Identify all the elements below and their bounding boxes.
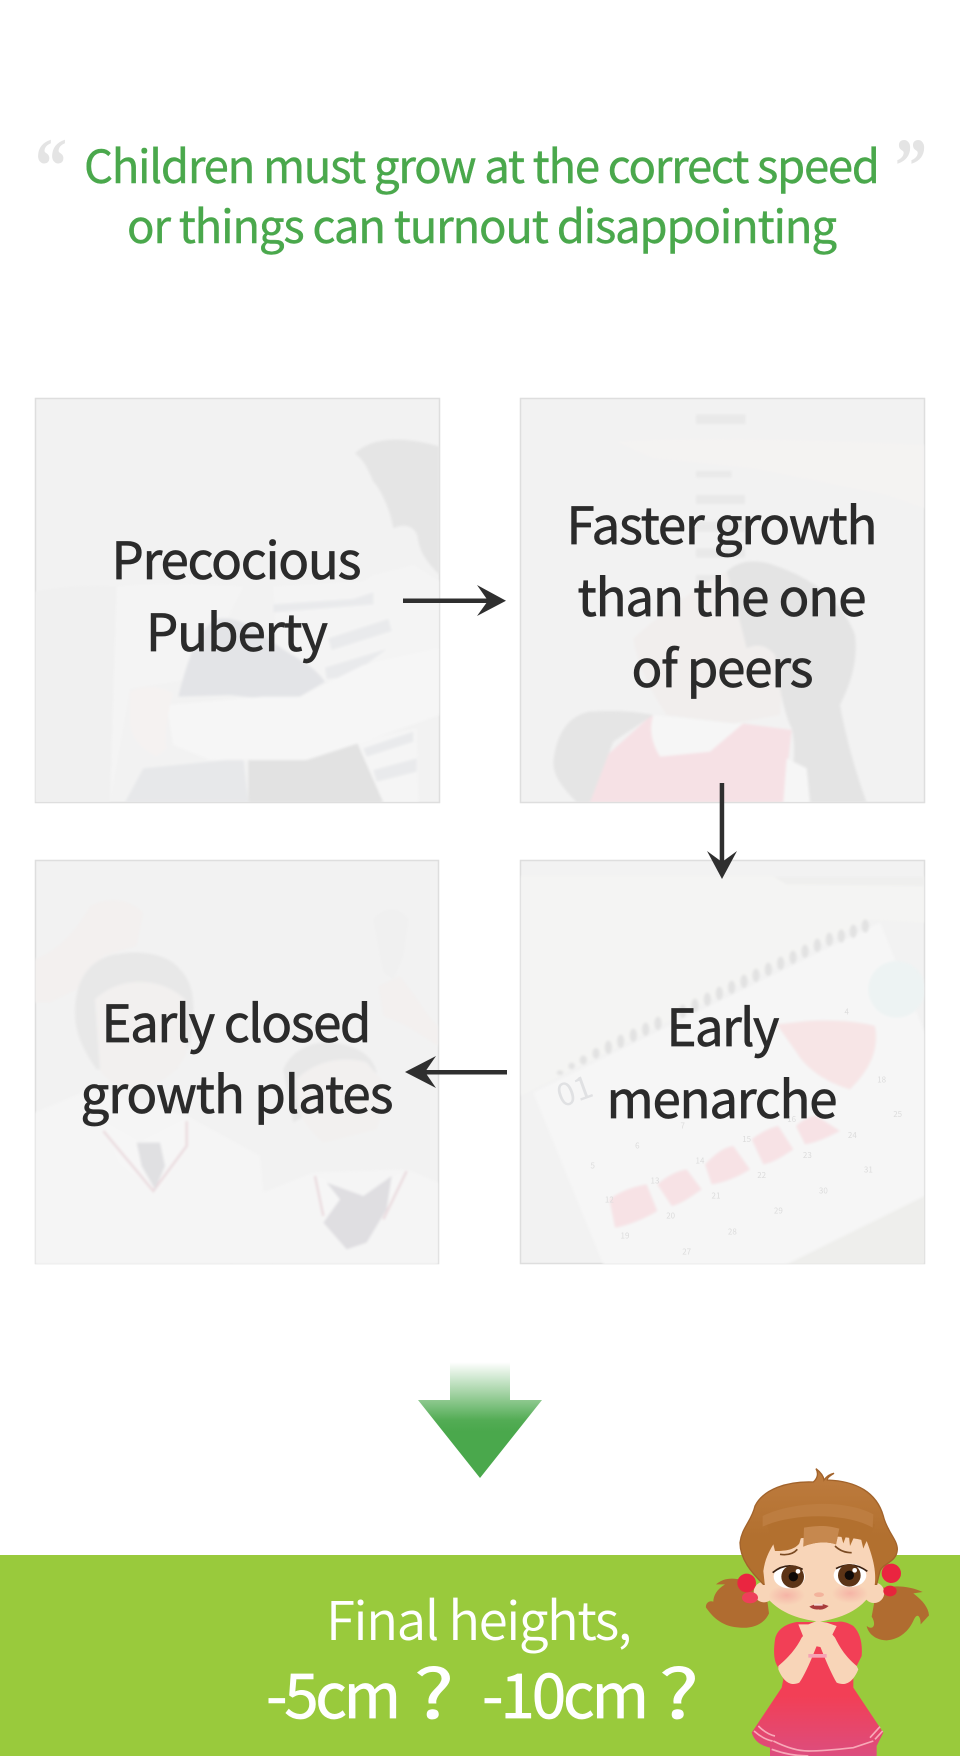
icon: closing quote mark: ” — [895, 122, 927, 209]
mouth — [809, 1604, 829, 1610]
panel: precocious puberty — [35, 398, 440, 802]
calendar dates: 16 — [787, 1114, 797, 1125]
illustration: worried girl — [706, 1469, 929, 1756]
arrow: right — [403, 585, 506, 616]
arrow: down — [707, 783, 737, 879]
face — [763, 1536, 875, 1622]
calendar dates: 23 — [803, 1150, 812, 1161]
photo: two students looking up — [36, 954, 438, 1264]
calendar dates: 12 — [605, 1195, 614, 1206]
calendar dates: 5 — [590, 1161, 595, 1172]
panel: faster growth — [520, 398, 925, 802]
calendar dates: 22 — [757, 1170, 767, 1181]
panel text — [80, 983, 394, 1128]
bangs — [767, 1516, 875, 1551]
arrow: left — [405, 1056, 507, 1088]
banner text: final heights: -5cm — [266, 1646, 401, 1736]
calendar dates: 15 — [742, 1134, 751, 1145]
panel text: menarche — [606, 1059, 838, 1133]
panel text: growth plates — [80, 1054, 394, 1128]
hands — [798, 1621, 837, 1648]
calendar dates: 14 — [696, 1155, 705, 1166]
calendar dates: 24 — [848, 1130, 857, 1141]
banner text: final heights: Final heights, — [326, 1580, 632, 1656]
calendar dates: 13 — [651, 1175, 659, 1186]
calendar dates: 25 — [893, 1109, 902, 1120]
panel: early closed growth plates — [35, 860, 439, 1264]
calendar dates: 27 — [682, 1246, 692, 1257]
hair tie left — [737, 1574, 758, 1603]
brows — [780, 1546, 852, 1555]
panel: early menarche — [520, 860, 925, 1264]
title — [84, 131, 880, 257]
calendar dates — [590, 1007, 902, 1257]
calendar dates: 29 — [774, 1206, 783, 1217]
nose — [814, 1592, 824, 1597]
panel text: Puberty — [146, 592, 328, 666]
calendar dates: 21 — [712, 1191, 720, 1202]
left pigtail — [706, 1579, 769, 1628]
panel text — [112, 520, 362, 666]
blush — [768, 1585, 805, 1605]
eye left — [773, 1565, 805, 1588]
calendar dates: 19 — [621, 1231, 629, 1242]
banner text: final heights — [266, 1580, 699, 1738]
hair tie right — [882, 1564, 901, 1596]
banner text: final heights: ? — [659, 1639, 699, 1738]
title: Children must grow at the correct speed — [84, 131, 880, 197]
panel text: than the one — [578, 557, 866, 631]
icon: opening quote mark: “ — [35, 122, 67, 209]
photo: woman sitting on sofa — [35, 440, 440, 802]
calendar dates: 6 — [635, 1141, 640, 1152]
calendar dates: 7 — [680, 1121, 685, 1132]
arms — [778, 1626, 858, 1684]
calendar dates: 4 — [844, 1007, 849, 1018]
dress — [752, 1622, 883, 1756]
calendar dates: 18 — [877, 1075, 887, 1086]
banner text: final heights: ? — [414, 1639, 454, 1738]
photo: calendar and menstrual cup: 01 — [549, 1062, 598, 1117]
panel text: Early — [666, 987, 780, 1061]
banner text: final heights: -10cm — [482, 1646, 649, 1736]
belt — [808, 1654, 827, 1658]
right pigtail — [867, 1586, 929, 1640]
calendar dates: 31 — [864, 1165, 873, 1176]
arrow: large green down arrow — [418, 1362, 542, 1478]
ears — [754, 1582, 774, 1602]
panel text — [566, 485, 878, 702]
hair — [740, 1469, 897, 1584]
calendar dates: 20 — [666, 1211, 676, 1222]
panel text: of peers — [632, 628, 814, 702]
calendar dates: 28 — [728, 1226, 737, 1237]
photo: calendar and menstrual cup — [558, 886, 924, 1264]
calendar dates: 30 — [819, 1186, 828, 1197]
panel text: Faster growth — [566, 485, 878, 559]
photo: child at height chart — [553, 414, 925, 802]
panel text — [606, 987, 838, 1133]
panel text: Early closed — [102, 983, 372, 1057]
title: or things can turnout disappointing — [127, 191, 837, 257]
skirt stripes — [754, 1726, 883, 1756]
panel text: Precocious — [112, 520, 362, 594]
banner: green result band — [0, 1555, 960, 1756]
eye right — [834, 1564, 867, 1587]
